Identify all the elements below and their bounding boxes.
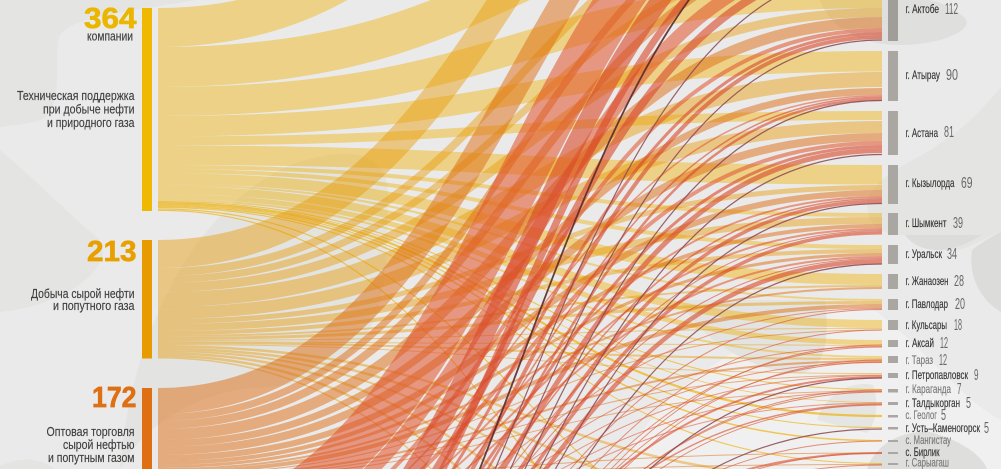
city labels: 39	[953, 215, 963, 232]
source label: wholesale trade: сырой нефтью	[63, 437, 135, 452]
city labels: г. Караганда	[906, 382, 951, 396]
city labels: г. Талдыкорган	[906, 396, 960, 410]
city labels: г. Уральск	[906, 247, 943, 261]
city labels: г. Аксай	[906, 336, 934, 350]
source label: technical support	[17, 3, 136, 130]
city labels: 5	[984, 420, 989, 437]
city labels: г. Актобе	[906, 2, 939, 16]
source label: crude oil production: 213	[87, 236, 136, 268]
city labels: 28	[954, 273, 964, 290]
source label: technical support: компании	[87, 28, 133, 44]
flows from source below the crop: orange-red	[293, 0, 882, 469]
source label: technical support: и природного газа	[47, 115, 135, 130]
source label: technical support: 364	[84, 3, 136, 35]
city labels: г. Астана	[906, 126, 938, 140]
city labels: г. Тараз	[906, 353, 933, 367]
city labels: 112	[945, 1, 958, 18]
source label: crude oil production: и попутного газа	[53, 298, 135, 313]
city labels: 81	[944, 124, 954, 141]
city labels: 34	[947, 246, 957, 263]
source bars	[142, 8, 152, 469]
source label: crude oil production: Добыча сырой нефти	[31, 286, 134, 301]
city labels: с. Геолог	[906, 408, 937, 422]
city labels: г. Жанаозен	[906, 274, 948, 288]
city labels	[906, 1, 989, 469]
flows from source below the crop: red	[403, 0, 882, 469]
dark flows	[478, 0, 882, 469]
source label: technical support: при добыче нефти	[43, 102, 134, 116]
source label: crude oil production	[31, 236, 136, 313]
city bars	[888, 0, 898, 465]
city labels: г. Павлодар	[906, 297, 948, 311]
city labels: с. Бирлик	[906, 445, 940, 459]
city labels: 12	[939, 352, 947, 369]
city labels: 7	[957, 381, 962, 398]
source label: wholesale trade: и попутным газом	[48, 450, 135, 465]
city labels: с. Мангистау	[906, 433, 951, 447]
source label: wholesale trade: Оптовая торговля	[46, 424, 134, 439]
source label: wholesale trade	[46, 382, 136, 465]
city labels: 18	[954, 317, 962, 334]
source label: technical support: Техническая поддержка	[17, 88, 135, 103]
city labels: 5	[966, 395, 971, 412]
source label: wholesale trade: 172	[92, 382, 136, 414]
city labels: г. Кызылорда	[906, 176, 955, 190]
city labels: 20	[955, 296, 965, 313]
city labels: 12	[940, 335, 948, 352]
flows from source: technical support	[158, 0, 882, 469]
flows from source: crude oil production	[158, 0, 882, 469]
flows from source: wholesale trade	[158, 0, 882, 469]
thin red flows to small cities	[590, 330, 882, 469]
city labels: г. Атырау	[906, 68, 940, 82]
city labels: 9	[974, 367, 979, 384]
city labels: г. Кульсары	[906, 318, 947, 332]
city labels: 90	[946, 67, 958, 84]
city labels: 69	[961, 175, 973, 192]
city labels: г. Петропавловск	[906, 368, 968, 382]
city labels: 5	[941, 407, 946, 424]
city labels: г. Шымкент	[906, 216, 947, 230]
